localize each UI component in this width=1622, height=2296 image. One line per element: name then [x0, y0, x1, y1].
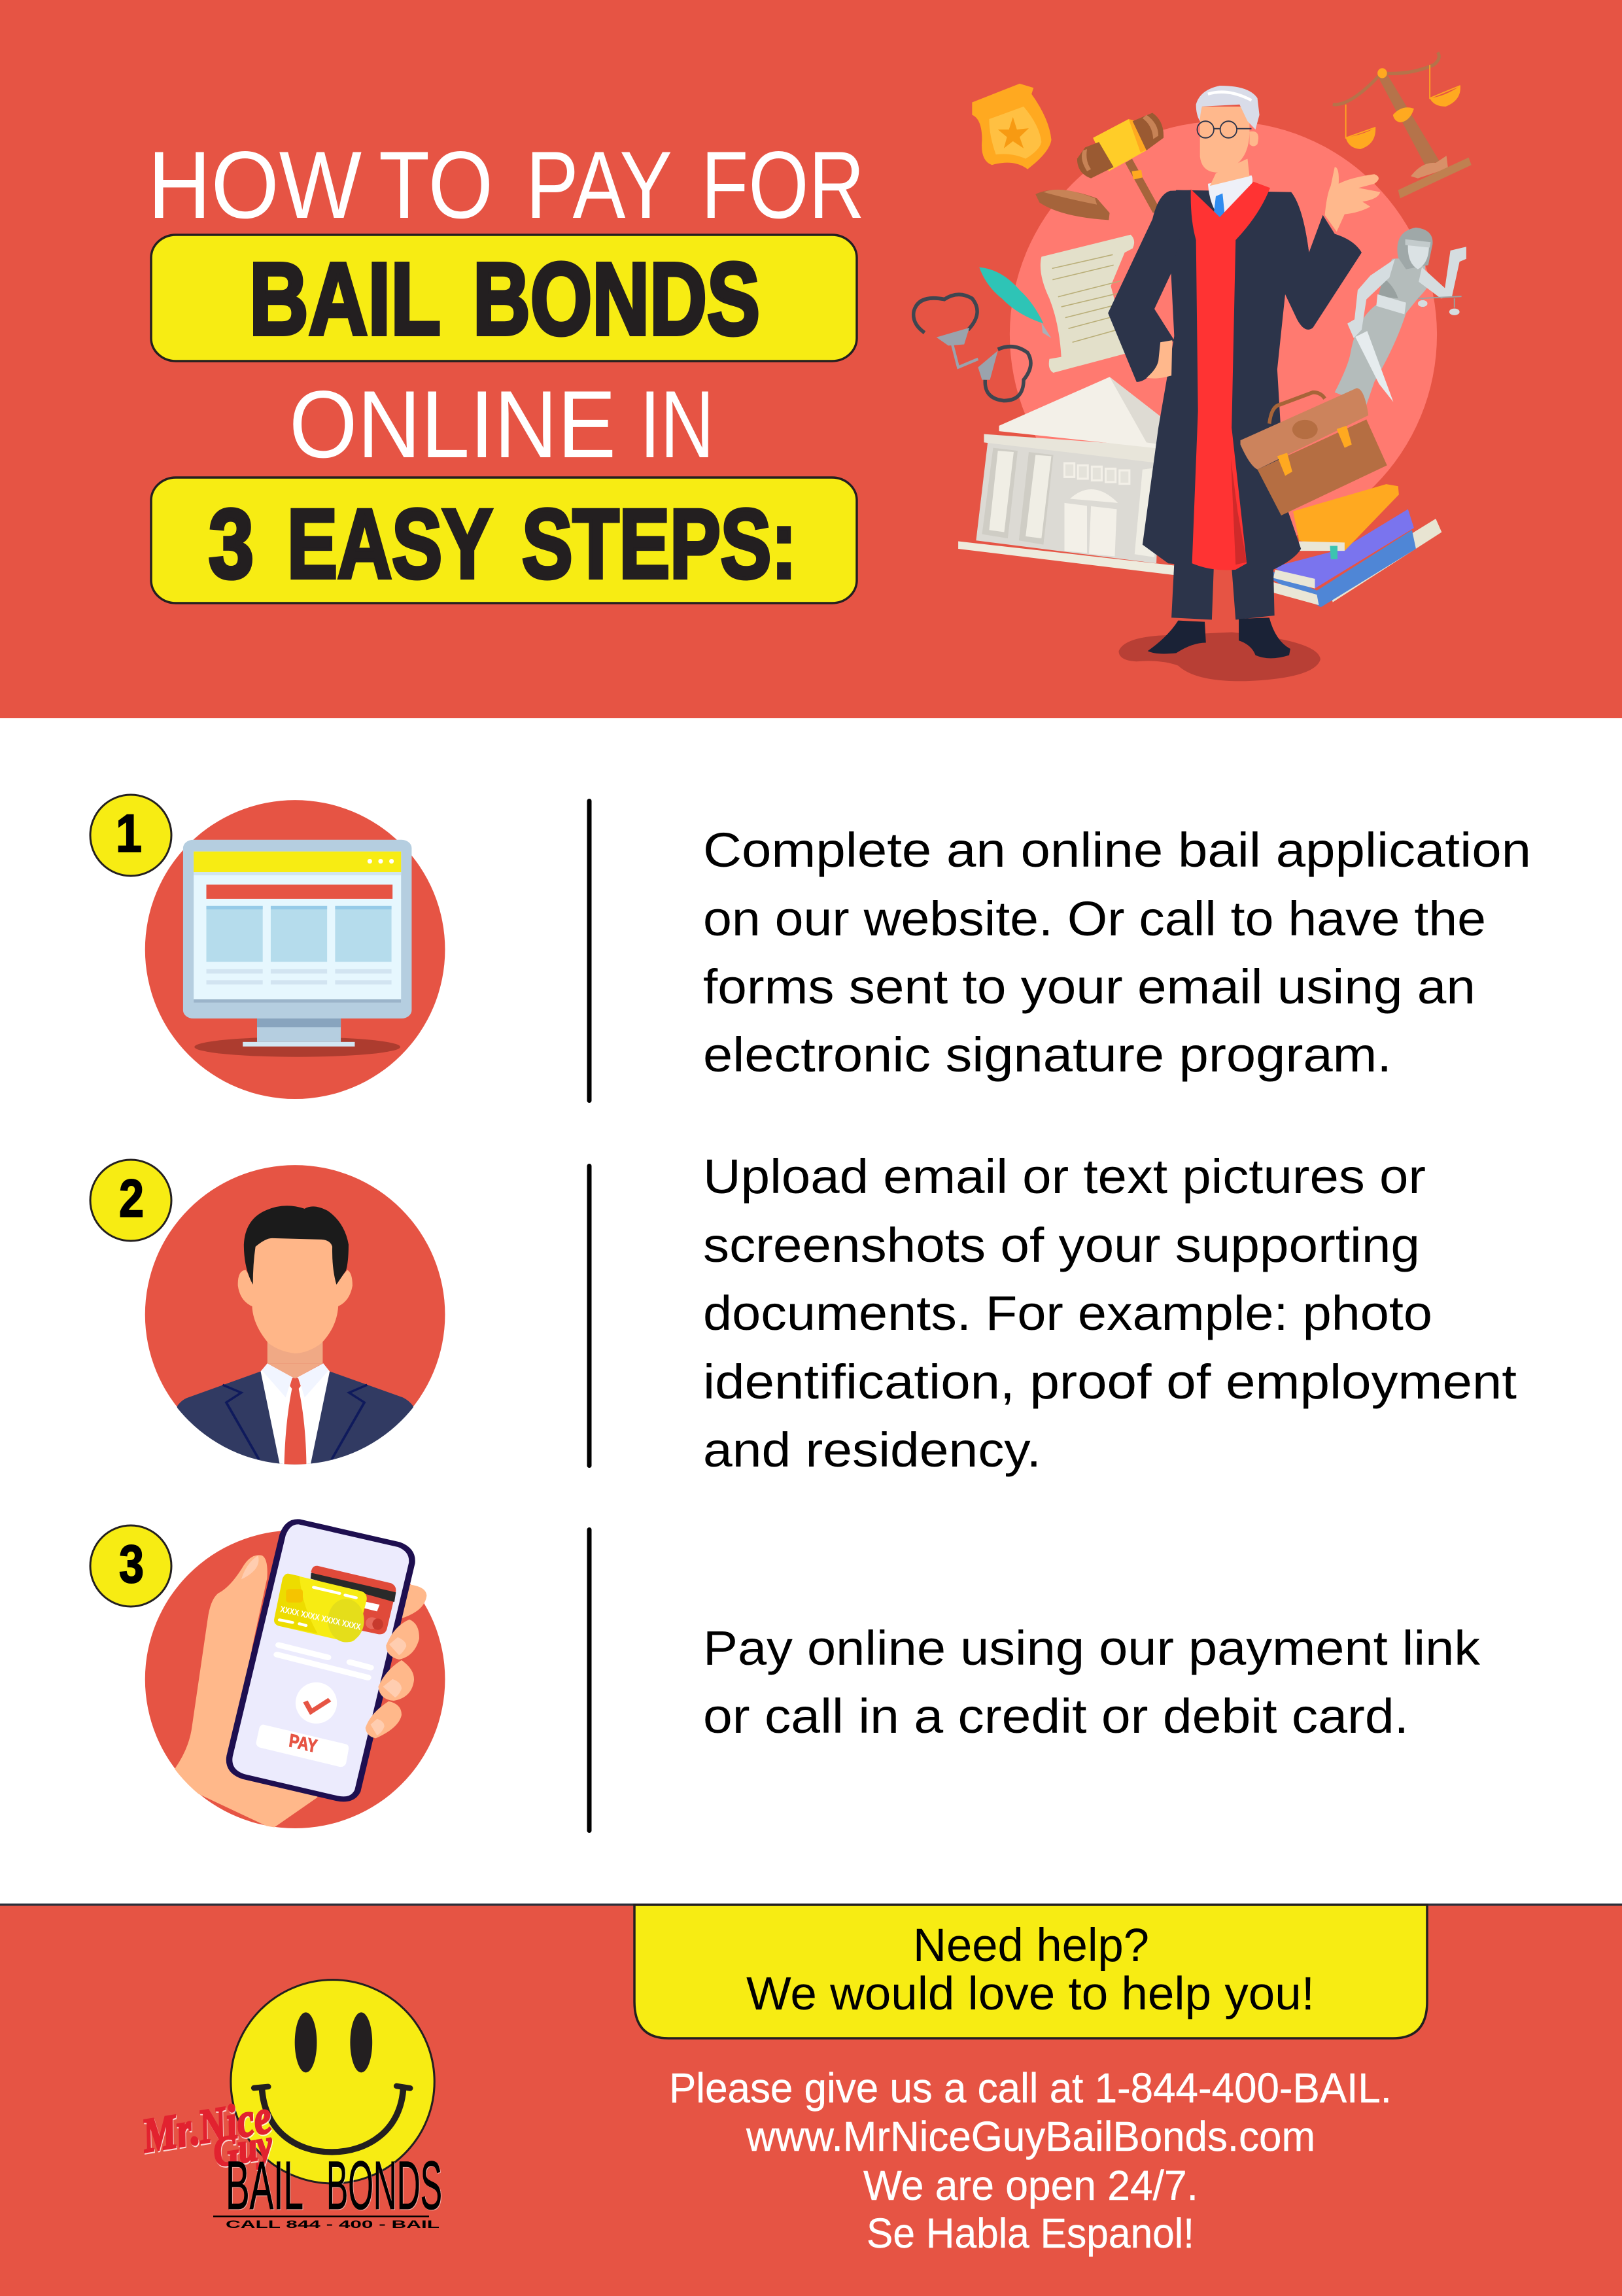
icon: briefcase	[1241, 388, 1387, 515]
logo smiley face	[231, 1980, 434, 2183]
step 1 text: forms sent to your email using an	[703, 960, 1475, 1014]
step 2 text: Upload email or text pictures or	[703, 1149, 1426, 1204]
title line: how to pay for	[148, 131, 865, 238]
step 3 text	[703, 1621, 1481, 1743]
icon: computer monitor	[145, 800, 445, 1099]
number badge 1	[90, 795, 171, 876]
title highlight: 3 easy steps: EASY	[287, 489, 492, 599]
icon: courthouse	[958, 377, 1174, 575]
icon: lady justice statue	[1335, 228, 1466, 405]
contact details: We are open 24/7.	[863, 2162, 1198, 2209]
logo script: Mr. Nice Guy: Mr.Nice	[138, 2090, 275, 2163]
credit cards: XXXX XXXX XXXX XXXX	[280, 1605, 361, 1632]
icon: scales of justice	[1333, 52, 1472, 198]
title highlight: bail bonds	[151, 235, 857, 361]
callout: need help	[634, 1905, 1427, 2038]
title highlight: bail bonds: BAIL	[249, 242, 441, 357]
step 1 text: electronic signature program.	[703, 1028, 1392, 1082]
illustration: judge with legal objects	[914, 52, 1472, 681]
icon: hand holding phone	[145, 1522, 445, 1829]
title line: how to pay for: HOW	[148, 131, 362, 238]
icon: scroll document	[1041, 235, 1134, 373]
number badge 2: 2	[119, 1169, 144, 1228]
title line: online in: ONLINE	[289, 371, 616, 478]
icon: police badge	[972, 84, 1052, 169]
number badge 2	[90, 1160, 171, 1241]
title line: how to pay for: PAY	[526, 131, 672, 238]
credit cards	[274, 1566, 396, 1643]
contact details: Se Habla Espanol!	[867, 2210, 1194, 2257]
title line: online in: IN	[640, 371, 714, 478]
step 1 text	[703, 823, 1531, 1082]
icon: gavel	[1035, 113, 1164, 220]
title highlight: bail bonds: BONDS	[473, 242, 760, 357]
step 3 text: or call in a credit or debit card.	[703, 1689, 1409, 1743]
step 2	[90, 1149, 1517, 1477]
icon: hand holding phone: PAY	[288, 1730, 319, 1757]
icon: feather quill	[979, 267, 1052, 338]
logo: Mr. Nice Guy Bail Bonds	[138, 1980, 442, 2231]
contact details: www.MrNiceGuyBailBonds.com	[746, 2113, 1315, 2160]
figure: judge in robe	[1108, 86, 1380, 658]
step 1	[90, 795, 1531, 1103]
title highlight: 3 easy steps	[151, 478, 857, 603]
step 2 text: and residency.	[703, 1423, 1041, 1477]
icon: person in suit	[145, 1165, 445, 1466]
contact details: Please give us a call at 1-844-400-BAIL.	[669, 2064, 1392, 2112]
step 2 text: screenshots of your supporting	[703, 1218, 1420, 1272]
step 2 text: documents. For example: photo	[703, 1286, 1432, 1340]
divider bar 1	[587, 799, 591, 1103]
title line: how to pay for: FOR	[701, 131, 865, 238]
logo wordmark: BAIL	[226, 2148, 303, 2224]
title line: how to pay for: TO	[379, 131, 493, 238]
number badge 3: 3	[119, 1535, 144, 1594]
number badge 3	[90, 1525, 171, 1607]
divider bar 3	[587, 1527, 591, 1833]
footer panel	[0, 1904, 1622, 2296]
step 1 text: on our website. Or call to have the	[703, 892, 1486, 946]
icon: handcuffs	[914, 294, 1031, 401]
step 1 text: Complete an online bail application	[703, 823, 1531, 877]
callout: need help: Need help?	[913, 1920, 1149, 1972]
title highlight: 3 easy steps: STEPS:	[522, 489, 797, 599]
logo script: Mr. Nice Guy: Guy	[210, 2121, 276, 2176]
callout: need help: We would love to help you!	[746, 1968, 1315, 2020]
logo phone line: CALL 844 - 400 - BAIL	[226, 2218, 440, 2231]
header panel	[0, 0, 1622, 718]
step 2 text: identification, proof of employment	[703, 1355, 1517, 1409]
step 3 text: Pay online using our payment link	[703, 1621, 1481, 1675]
contact details	[669, 2064, 1392, 2257]
number badge 1: 1	[116, 804, 142, 863]
divider bar 2	[587, 1164, 591, 1468]
step 2 text	[703, 1149, 1517, 1477]
step 3	[90, 1522, 1481, 1833]
title highlight: 3 easy steps: 3	[209, 489, 254, 599]
footer panel: BONDS	[326, 2148, 442, 2224]
logo script: Mr. Nice Guy	[138, 2090, 276, 2176]
logo wordmark	[226, 2148, 442, 2224]
icon: stack of books	[1273, 484, 1441, 607]
